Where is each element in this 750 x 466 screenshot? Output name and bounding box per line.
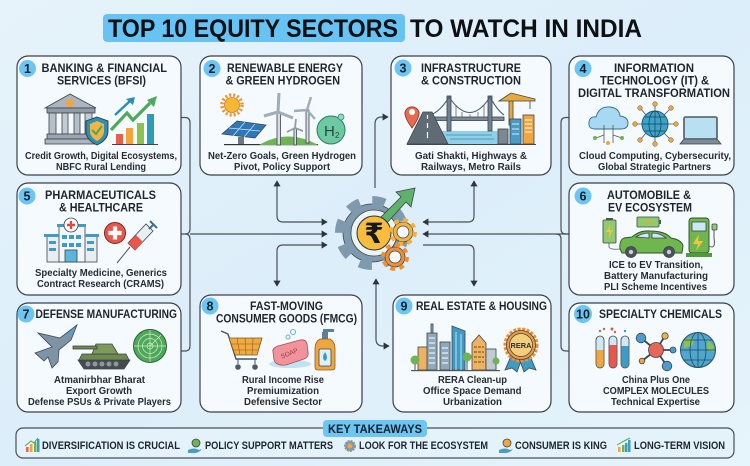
body 9: Office Space Demand <box>423 386 522 397</box>
heading 8: FAST-MOVING <box>250 300 323 313</box>
body 3 <box>415 151 528 173</box>
body 9: RERA Clean-up <box>438 375 507 386</box>
badge 7 <box>18 306 34 322</box>
panel 4: information technology <box>569 56 734 175</box>
heading 4 <box>578 62 730 100</box>
body 4: Global Strategic Partners <box>598 162 711 173</box>
heading 1: BANKING & FINANCIAL <box>42 62 167 75</box>
body 3: Gati Shakti, Highways & <box>415 151 528 162</box>
title: TO WATCH IN INDIA <box>410 15 642 43</box>
body 1 <box>25 151 177 173</box>
icon: soap bar <box>269 330 311 368</box>
heading 4: INFORMATION <box>614 62 694 75</box>
body 3: Railways, Metro Rails <box>421 162 521 173</box>
panel 3: infrastructure <box>391 56 551 175</box>
icon: cloud <box>589 107 628 145</box>
panel 1: banking <box>17 56 181 175</box>
takeaway: diversification: DIVERSIFICATION IS CRUCIAL <box>42 440 180 452</box>
badge 3 <box>394 60 412 76</box>
icon: molecule <box>636 333 676 371</box>
heading 8: CONSUMER GOODS (FMCG) <box>216 312 357 326</box>
icon: wind turbines and hill <box>259 93 318 145</box>
badge 9: 9 <box>401 300 408 314</box>
badge 5: 5 <box>24 190 31 204</box>
takeaway: consumer <box>499 439 607 453</box>
heading 2 <box>226 62 343 88</box>
heading 5 <box>45 189 156 215</box>
key takeaways bar <box>16 420 734 458</box>
body 7 <box>28 375 171 408</box>
icon: hydrogen <box>317 114 345 144</box>
central gear icon: ₹ <box>364 217 384 250</box>
heading 6: EV ECOSYSTEM <box>608 202 692 215</box>
panel 5: pharmaceuticals <box>17 183 181 295</box>
icon: hospital <box>44 218 99 262</box>
icon: radar <box>134 330 166 362</box>
badge 4: 4 <box>580 62 587 76</box>
takeaway: long-term vision <box>617 438 725 452</box>
body 10 <box>603 375 709 408</box>
heading 8 <box>216 300 357 326</box>
heading 4: TECHNOLOGY (IT) & <box>600 74 710 88</box>
takeaway: diversification <box>25 438 180 452</box>
badge 5 <box>18 188 36 204</box>
icon: RERA badge: RERA <box>510 341 532 350</box>
connectors: left and centre flows <box>181 117 569 351</box>
badge 1: 1 <box>24 62 31 76</box>
icon: tank <box>73 344 130 369</box>
body 8: Premiumization <box>247 386 319 397</box>
key takeaways label: KEY TAKEAWAYS <box>328 424 422 436</box>
icon: globe <box>680 332 716 368</box>
badge 2 <box>204 60 220 77</box>
icon: bridge and water <box>428 96 504 144</box>
body 4: Cloud Computing, Cybersecurity, <box>579 151 731 162</box>
body 1: NBFC Rural Lending <box>56 162 146 173</box>
key takeaways label <box>323 420 427 437</box>
takeaway: ecosystem: LOOK FOR THE ECOSYSTEM <box>359 440 488 452</box>
title <box>103 14 642 43</box>
body 7: Defense PSUs & Private Players <box>28 397 171 408</box>
icon: hydrogen: 2 <box>335 131 340 140</box>
icon: batteries <box>603 217 661 249</box>
heading 10: SPECIALTY CHEMICALS <box>599 308 722 321</box>
body 1: Credit Growth, Digital Ecosystems, <box>25 151 177 162</box>
body 6: PLI Scheme Incentives <box>604 282 707 293</box>
icon: laptop <box>680 117 721 144</box>
icon: globe network <box>633 102 678 146</box>
takeaway: policy support <box>188 439 333 453</box>
badge 2: 2 <box>209 62 216 76</box>
body 8: Defensive Sector <box>244 397 322 408</box>
heading 6: AUTOMOBILE & <box>607 189 692 202</box>
panel 2: renewable energy <box>200 56 362 175</box>
body 9: Urbanization <box>443 397 502 408</box>
badge 4 <box>574 60 592 77</box>
heading 4: DIGITAL TRANSFORMATION <box>578 87 730 100</box>
heading 6 <box>607 189 692 215</box>
body 8 <box>242 375 324 408</box>
icon: test tubes <box>596 328 629 368</box>
heading 3: & CONSTRUCTION <box>421 74 521 88</box>
central gear icon <box>340 188 415 269</box>
icon: charging station <box>686 218 717 257</box>
icon: city buildings <box>410 324 500 371</box>
badge 10 <box>574 305 592 323</box>
body 10: COMPLEX MOLECULES <box>603 386 709 397</box>
badge 6 <box>574 188 592 204</box>
icon: soap bar: SOAP <box>280 347 299 361</box>
panel 10: specialty chemicals <box>569 303 734 412</box>
heading 1: SERVICES (BFSI) <box>57 74 146 88</box>
icon: growth bars and arrows <box>111 96 158 145</box>
body 5: Specialty Medicine, Generics <box>35 268 167 279</box>
heading 3 <box>421 62 521 88</box>
body 4 <box>579 151 731 173</box>
badge 6: 6 <box>580 190 587 204</box>
body 6 <box>604 260 708 293</box>
takeaway: long-term vision: LONG-TERM VISION <box>634 440 725 452</box>
body 9 <box>423 375 522 408</box>
badge 3: 3 <box>400 62 407 76</box>
heading 2: & GREEN HYDROGEN <box>226 74 340 88</box>
heading 2: RENEWABLE ENERGY <box>227 62 343 75</box>
panel 6: automobile <box>569 183 734 295</box>
body 10: Technical Expertise <box>611 397 700 408</box>
badge 1 <box>19 60 36 77</box>
takeaway: consumer: CONSUMER IS KING <box>515 440 607 452</box>
panel 8: FMCG <box>200 295 362 412</box>
heading 1 <box>42 62 167 88</box>
heading 5: & HEALTHCARE <box>59 202 143 215</box>
body 5: Contract Research (CRAMS) <box>37 279 164 290</box>
body 2: Pivot, Policy Support <box>234 162 331 173</box>
badge 10: 10 <box>576 308 590 322</box>
body 6: Battery Manufacturing <box>604 271 708 282</box>
body 7: Export Growth <box>66 386 132 397</box>
heading 9: REAL ESTATE & HOUSING <box>416 300 547 313</box>
icon: RERA badge <box>505 329 537 372</box>
icon: hydrogen: H <box>324 123 335 140</box>
takeaway: policy support: POLICY SUPPORT MATTERS <box>205 440 333 452</box>
body 10: China Plus One <box>622 375 690 386</box>
body 5 <box>35 268 167 290</box>
badge 8: 8 <box>207 300 214 314</box>
icon: shopping cart <box>221 331 262 370</box>
icon: solar panel <box>222 121 318 145</box>
body 8: Rural Income Rise <box>242 375 324 386</box>
icon: crane and buildings <box>407 93 536 145</box>
icon: bank with shield <box>45 94 108 145</box>
body 2: Net-Zero Goals, Green Hydrogen <box>208 151 356 162</box>
body 2 <box>208 151 356 173</box>
panel 9: real estate <box>393 295 551 412</box>
icon: sun <box>222 95 242 115</box>
badge 7: 7 <box>23 308 30 322</box>
icon: fighter jet <box>35 325 77 368</box>
heading 7: DEFENSE MANUFACTURING <box>36 308 177 321</box>
panel 7: defense <box>17 303 181 412</box>
heading 5: PHARMACEUTICALS <box>45 189 156 202</box>
title: TOP 10 EQUITY SECTORS <box>108 15 398 43</box>
heading 3: INFRASTRUCTURE <box>421 62 521 75</box>
body 6: ICE to EV Transition, <box>609 260 703 271</box>
icon: liquid bottle <box>315 329 335 370</box>
body 7: Atmanirbhar Bharat <box>54 375 146 386</box>
icon: syringe <box>117 221 157 263</box>
badge 9 <box>396 298 412 314</box>
icon: road and pin <box>405 107 448 144</box>
badge 8 <box>202 298 218 314</box>
icon: electric car <box>620 231 683 258</box>
icon: medical cross <box>104 222 126 244</box>
